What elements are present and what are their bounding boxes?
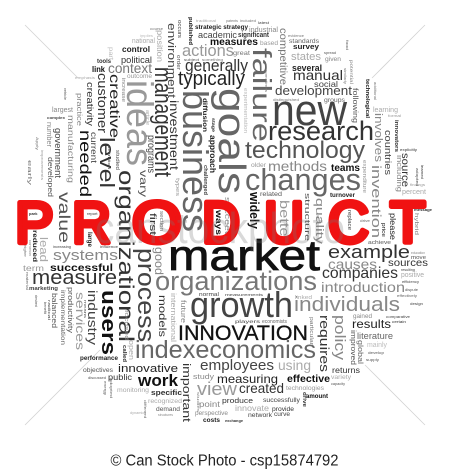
horizontal words: lower half: measuring	[217, 372, 278, 386]
title: PRODUCT: C	[328, 190, 369, 256]
vertical words: lower half: models	[156, 295, 167, 337]
vertical words: lower half: open	[127, 340, 134, 360]
vertical words: lower half: material	[25, 272, 29, 290]
vertical words: upper half: part	[107, 47, 113, 60]
horizontal words: lower half: monitoring	[117, 388, 149, 394]
title: PRODUCT: R	[72, 190, 111, 256]
horizontal words: upper half: message	[414, 207, 433, 212]
horizontal words: upper half: generally	[185, 56, 248, 75]
horizontal words: lower half: successful	[50, 263, 113, 274]
vertical words: upper half: involves	[372, 113, 384, 163]
small words inside the title letters: report	[87, 211, 98, 216]
title: PRODUCT: P	[15, 190, 54, 256]
horizontal words: lower half: variety	[331, 375, 351, 381]
horizontal words: lower half: mainly	[367, 342, 387, 349]
vertical words: upper half: order	[175, 55, 181, 70]
horizontal words: upper half: tools	[97, 59, 112, 65]
vertical words: lower half: studies	[196, 392, 200, 412]
horizontal words: upper half: outcome	[127, 74, 153, 80]
horizontal words: upper half: technology	[245, 137, 365, 164]
horizontal words: lower half: comparative	[386, 315, 410, 319]
horizontal words: upper half: evidence	[288, 34, 304, 38]
horizontal words: lower half: specific	[151, 388, 182, 397]
horizontal words: lower half: literature	[357, 331, 393, 341]
horizontal words: lower half: view	[197, 379, 238, 399]
horizontal words: upper half: given	[325, 57, 341, 63]
horizontal words: upper half: academic	[198, 30, 237, 40]
vertical words: lower half: good	[152, 247, 166, 275]
horizontal words: lower half: work	[137, 371, 179, 390]
horizontal words: lower half: employees	[200, 357, 274, 374]
horizontal words: lower half: move	[411, 255, 426, 261]
horizontal words: lower half: successfully	[263, 397, 301, 404]
vertical words: lower half: section	[158, 211, 164, 231]
horizontal words: lower half: marketing	[29, 286, 58, 292]
horizontal words: upper half: formal	[388, 114, 401, 118]
vertical words: upper half: Apply	[35, 137, 39, 150]
vertical words: lower half: price	[380, 223, 386, 237]
horizontal words: upper half: states	[291, 51, 321, 63]
horizontal words: upper half: social	[314, 80, 338, 89]
horizontal words: lower half: provide	[272, 407, 295, 413]
vertical words: upper half: competitive	[277, 28, 288, 85]
horizontal words: lower half: positive	[401, 272, 424, 279]
horizontal words: lower half: supply	[366, 358, 379, 362]
horizontal words: upper half: manual	[293, 67, 343, 83]
vertical words: upper half: business	[175, 90, 216, 232]
vertical words: upper half: approach	[208, 135, 217, 173]
horizontal words: lower half: recognized	[148, 399, 182, 405]
vertical words: lower half: energy	[103, 381, 107, 395]
vertical words: lower half: reduced	[31, 230, 37, 262]
title: PRODUCT: T	[390, 190, 425, 256]
horizontal words: upper half: groups	[324, 98, 345, 104]
vertical words: lower half: important	[180, 363, 192, 422]
horizontal words: lower half: structures	[158, 413, 173, 417]
vertical words: lower half: improved	[349, 330, 356, 365]
horizontal words: upper half: teams	[331, 163, 360, 174]
vertical words: lower half: succeed	[223, 197, 230, 237]
horizontal words: lower half: produce	[222, 396, 253, 405]
vertical words: lower half	[23, 197, 397, 422]
vertical words: lower half: large	[86, 232, 92, 248]
vertical words: lower half: industry	[85, 290, 100, 346]
vertical words: upper half: ideas	[119, 80, 160, 166]
vertical words: upper half: failure	[247, 48, 277, 142]
horizontal words: lower half: companies	[322, 265, 398, 282]
vertical words: upper half: studied	[114, 150, 120, 170]
horizontal words: lower half: curve	[274, 412, 291, 418]
vertical words: lower half: balanced	[50, 293, 57, 328]
horizontal words: lower half: effectively	[397, 294, 417, 298]
horizontal words: lower half: certain	[392, 320, 406, 324]
horizontal words: lower half	[23, 232, 428, 424]
vertical words: upper half: types	[174, 178, 180, 197]
corner diagonal lines	[25, 25, 425, 425]
horizontal words: upper half: methods	[268, 158, 327, 174]
vertical words: upper half: quality	[313, 198, 325, 245]
vertical words: lower half: adopted	[109, 378, 114, 398]
vertical words: upper half: increase	[120, 78, 126, 102]
horizontal words: lower half: INNOVATION	[178, 322, 308, 345]
vertical words: upper half: better	[277, 200, 292, 243]
vertical words: upper half: challenged	[202, 165, 208, 195]
vertical words: upper half: article	[144, 110, 150, 125]
horizontal words: upper half: older	[251, 163, 266, 169]
vertical words: upper half: following	[351, 88, 360, 123]
vertical words: lower half: drive	[301, 392, 307, 407]
vertical words: upper half: programs	[145, 135, 156, 173]
horizontal words: lower half: perspective	[195, 411, 229, 417]
vertical words: upper half: adopted	[415, 168, 419, 186]
vertical words: upper half: expenditure	[361, 160, 367, 193]
horizontal words: upper half: context	[108, 60, 152, 76]
horizontal words: upper half: percent	[402, 189, 426, 196]
vertical words: lower half: first	[148, 213, 158, 236]
horizontal words: upper half: emphasis	[75, 75, 95, 80]
vertical words: lower half: implementation	[59, 290, 66, 345]
horizontal words: lower half: gained	[353, 314, 372, 320]
horizontal words: lower half: dispute	[405, 288, 418, 292]
vertical words: upper half: potential	[349, 60, 354, 84]
vertical words: upper half: creativity	[85, 82, 95, 127]
horizontal words: upper half: explicitly	[400, 147, 417, 152]
horizontal words: lower half: term	[23, 264, 44, 273]
horizontal words: lower half: amount	[306, 394, 328, 400]
vertical words: lower half: please	[388, 213, 397, 241]
vertical words: upper half: environment	[165, 23, 177, 98]
vertical words: upper half: similarly	[343, 68, 348, 84]
horizontal words: lower half: exchange	[225, 419, 243, 423]
horizontal words: upper half: development	[275, 83, 352, 98]
title: PRODUCT	[15, 190, 425, 256]
vertical words: upper half: hybrid	[413, 213, 419, 235]
horizontal words: lower half: results	[352, 317, 391, 331]
horizontal words: upper half: measures	[210, 37, 258, 48]
horizontal words: lower half: causes	[328, 256, 377, 272]
horizontal words: lower half: economists	[262, 319, 287, 325]
vertical words: upper half: sometimes	[264, 70, 268, 92]
vertical words: lower half: radical	[47, 300, 51, 320]
horizontal words: upper half: spread	[324, 51, 336, 55]
vertical words: upper half: value	[55, 192, 72, 243]
horizontal words: upper half: turnover	[330, 193, 356, 199]
horizontal words: upper half: control	[122, 45, 150, 54]
vertical words: lower half: drive	[360, 218, 371, 223]
horizontal words: upper half: changes	[245, 162, 361, 197]
horizontal words: upper half: significant	[238, 32, 270, 39]
horizontal words: lower half: using	[278, 357, 311, 373]
horizontal words: upper half	[47, 19, 433, 212]
horizontal words: lower half: returns	[332, 366, 360, 375]
vertical words: lower half: process	[132, 248, 159, 342]
horizontal words: lower half: public	[108, 372, 133, 382]
vertical words: upper half: technological	[364, 79, 370, 119]
vertical words: upper half: additional	[373, 82, 377, 100]
horizontal words: upper half: distinguished	[273, 98, 299, 102]
horizontal words: upper half: link	[92, 65, 106, 74]
vertical words: lower half: called	[121, 345, 127, 362]
vertical words: upper half: customer	[95, 73, 110, 134]
vertical words: upper half: improvements	[40, 150, 45, 180]
title: PRODUCT: U	[264, 190, 304, 256]
vertical words: lower half: global	[356, 340, 363, 365]
vertical words: upper half: learned	[420, 165, 424, 179]
horizontal words: lower half: growth	[190, 284, 293, 325]
horizontal words: upper half: latest	[258, 21, 269, 25]
horizontal words: upper half: survey	[293, 44, 319, 51]
horizontal words: lower half: point	[199, 400, 221, 409]
vertical words: lower half: different	[143, 400, 147, 418]
vertical words: upper half: manufacturing	[66, 115, 75, 183]
horizontal words: upper half: traditional	[196, 19, 216, 23]
horizontal words: upper half: national	[132, 38, 155, 45]
vertical words: upper half: early	[26, 160, 32, 186]
horizontal words: upper half: research	[268, 116, 374, 146]
horizontal words: upper half: related	[260, 192, 282, 198]
vertical words: lower half: particular	[308, 317, 314, 345]
horizontal words: upper half: implies	[140, 34, 153, 38]
horizontal words: lower half: network	[248, 413, 273, 419]
vertical words: lower half: users	[97, 290, 119, 355]
vertical words: lower half: policy	[331, 315, 348, 361]
horizontal words: upper half: patents	[226, 19, 238, 23]
vertical words: upper half: structure	[303, 193, 310, 241]
horizontal words: upper half: included	[240, 19, 256, 23]
horizontal words: lower half: measure	[32, 267, 117, 289]
vertical words: upper half: needed	[76, 130, 93, 197]
horizontal words: lower half: demand	[156, 406, 180, 413]
horizontal words: lower half: created	[239, 380, 284, 396]
horizontal words: upper half: learning	[373, 107, 398, 114]
vertical words: upper half: number	[45, 122, 52, 148]
horizontal words: upper half: complex	[47, 116, 65, 120]
horizontal words: lower half: effective	[287, 374, 330, 385]
vertical words: upper half: definition	[107, 145, 112, 169]
horizontal words: lower half: indexeconomics	[135, 336, 316, 364]
horizontal words: upper half: several	[292, 63, 322, 73]
horizontal words: upper half: based	[260, 40, 278, 47]
horizontal words: lower half: individuals	[294, 294, 400, 316]
vertical words: upper half: creative	[107, 74, 123, 138]
horizontal words: lower half: develop	[368, 351, 384, 355]
vertical words: upper half: organizational	[114, 170, 137, 342]
vertical words: lower half: higher	[23, 245, 27, 258]
vertical words: upper half: widely	[247, 191, 262, 230]
vertical words: lower half: desired	[34, 295, 38, 307]
vertical words: upper half: experimentation	[242, 88, 248, 133]
vertical words: upper half: diffusion	[201, 98, 208, 132]
horizontal words: lower half: introduction	[321, 279, 405, 295]
vertical words: upper half: management	[149, 67, 176, 177]
horizontal words: upper half: political	[121, 55, 152, 65]
horizontal words: upper half: findings	[410, 182, 425, 187]
vertical words: upper half: including	[395, 155, 402, 192]
footer credit: © Can Stock Photo - csp15874792	[110, 452, 338, 470]
vertical words: upper half: invention	[369, 165, 384, 238]
vertical words: upper half: countries	[383, 130, 393, 176]
horizontal words: lower half: efficiency	[402, 279, 419, 284]
horizontal words: upper half: standards	[289, 38, 320, 45]
vertical words: upper half: level	[95, 137, 117, 188]
vertical words: lower half: services	[73, 292, 87, 350]
vertical words: lower half: replace	[346, 210, 352, 230]
vertical words: upper half: source	[399, 153, 410, 187]
horizontal words: lower half: dynamics	[130, 411, 146, 415]
title: PRODUCT: O	[132, 190, 182, 256]
vertical words: lower half: means	[83, 300, 88, 318]
vertical words: lower half: lead	[37, 237, 49, 262]
horizontal words: lower half: achieve	[368, 240, 391, 246]
horizontal words: lower half: linked	[295, 295, 312, 301]
vertical words: upper half: investment	[167, 100, 181, 171]
vertical words: upper half: practice	[75, 93, 82, 126]
horizontal words: lower half: influence	[100, 244, 119, 249]
horizontal words: lower half: capacity	[331, 382, 345, 386]
horizontal words: upper half: largest	[52, 107, 73, 114]
vertical words: lower half: common	[28, 240, 33, 256]
horizontal words: upper half: typically	[178, 68, 245, 90]
horizontal words: upper half: great	[233, 51, 250, 57]
horizontal words: upper half: course	[150, 27, 163, 31]
vertical words: lower half: future	[179, 300, 186, 323]
horizontal words: lower half: performance	[80, 356, 119, 362]
horizontal words: lower half: objectives	[83, 368, 113, 374]
horizontal words: lower half: study	[193, 372, 214, 381]
horizontal words: lower half: technologies	[286, 386, 324, 392]
small words inside the title letters	[29, 211, 98, 216]
horizontal words: upper half: subject	[184, 58, 199, 62]
horizontal words: lower half: innovative	[118, 363, 178, 375]
vertical words: upper half: food	[345, 40, 349, 50]
vertical words: lower half: benefit	[43, 302, 47, 314]
horizontal words: lower half: example	[328, 242, 410, 262]
vertical words: lower half: requires	[317, 315, 332, 373]
horizontal words: lower half: systems	[53, 247, 118, 264]
vertical words: upper half: current	[89, 132, 98, 164]
title: PRODUCT: D	[202, 190, 240, 256]
horizontal words: lower half: discussed	[88, 376, 106, 380]
horizontal words: lower half: organizations	[155, 266, 317, 296]
vertical words: lower half: productivity	[66, 287, 73, 334]
horizontal words: lower half: measurements	[225, 292, 263, 297]
horizontal words: lower half: normal	[199, 292, 219, 298]
vertical words: upper half	[26, 17, 424, 342]
stock photo watermark over title: canstockphoto	[95, 204, 345, 253]
horizontal words: lower half: innovate	[235, 404, 270, 413]
vertical words: lower half: focused	[123, 310, 129, 340]
vertical words: upper half: government	[53, 128, 63, 179]
vertical words: lower half: ways	[214, 209, 223, 236]
horizontal words: lower half: players	[235, 319, 261, 324]
horizontal words: lower half: education	[411, 250, 425, 255]
vertical words: upper half: published	[187, 17, 193, 45]
vertical words: upper half: stage	[211, 118, 216, 133]
vertical words: upper half: occurs	[176, 20, 182, 39]
vertical words: upper half: vehicle	[63, 88, 67, 100]
horizontal words: lower half: increasing	[53, 244, 71, 249]
vertical words: upper half: goals	[210, 88, 252, 194]
vertical words: upper half: position	[155, 30, 164, 62]
horizontal words: upper half: actions	[182, 41, 234, 60]
horizontal words: upper half: something	[202, 58, 223, 62]
small words inside the title letters: park	[29, 211, 38, 216]
horizontal words: upper half: strategic strategy	[195, 24, 248, 31]
vertical words: upper half: vary	[137, 170, 148, 197]
horizontal words: lower half: sources	[388, 258, 428, 269]
vertical words: lower half: international	[169, 293, 176, 343]
vertical words: upper half: innovators	[393, 120, 399, 152]
horizontal words: lower half: market	[168, 232, 320, 280]
horizontal words: lower half: design	[410, 302, 423, 306]
horizontal words: lower half: resulting	[401, 268, 415, 272]
horizontal words: upper half: new	[272, 86, 347, 135]
horizontal words: upper half: industrial	[249, 27, 278, 34]
horizontal words: lower half: costs	[203, 417, 220, 424]
vertical words: upper half: developed	[46, 157, 53, 197]
